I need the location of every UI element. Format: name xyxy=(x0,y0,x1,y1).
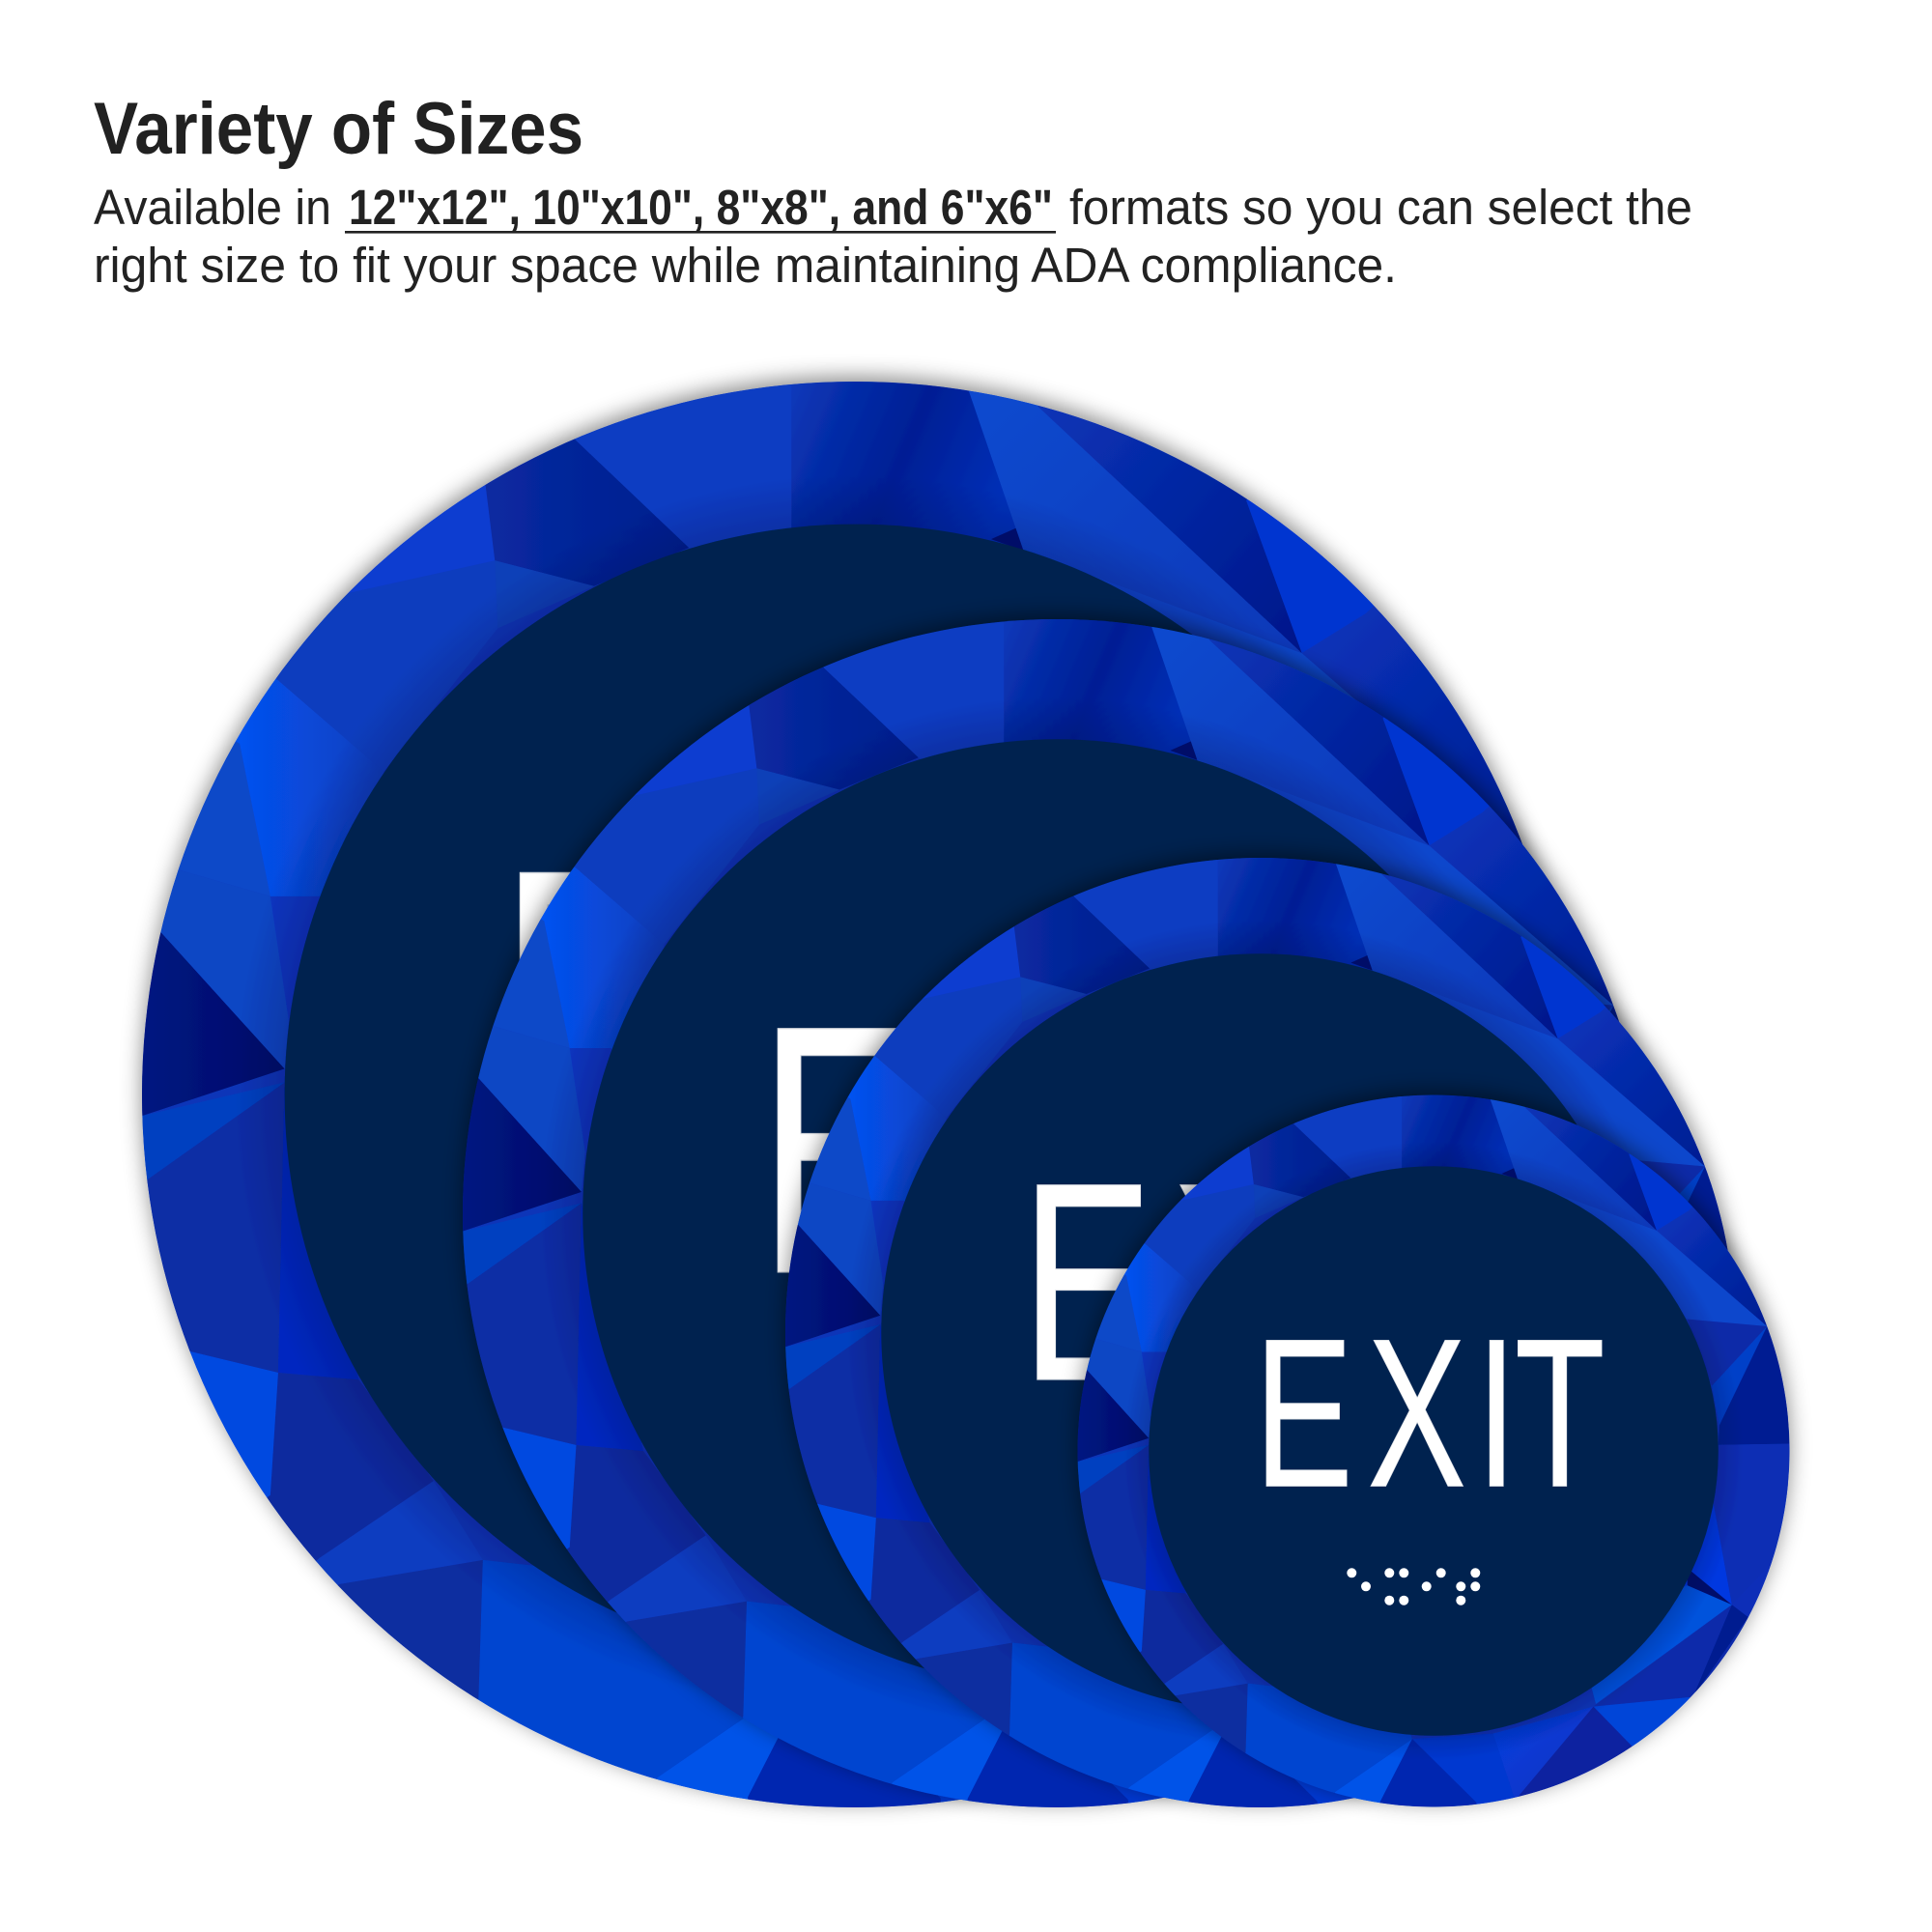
bold sizes underline xyxy=(345,231,1056,234)
navy face xyxy=(582,739,1531,1688)
faceted blue ring xyxy=(1069,1083,1804,1816)
navy face xyxy=(881,953,1639,1712)
braille dots xyxy=(1347,1568,1480,1605)
EXIT lettering: EXIT xyxy=(1254,1294,1605,1532)
line 1 lead-in: Available in xyxy=(94,180,331,235)
faceted blue ring xyxy=(456,607,1643,1817)
sign: 6x6 xyxy=(1069,1083,1804,1816)
navy face xyxy=(1149,1166,1719,1736)
line 1 bold sizes: 12"x12", 10"x10", 8"x8", and 6"x6" xyxy=(349,180,1053,235)
EXIT lettering: EXIT xyxy=(1021,1123,1490,1440)
faceted blue ring xyxy=(777,846,1746,1817)
line 1 ending: formats so you can select the xyxy=(1069,180,1692,235)
sign: 10x10 xyxy=(456,607,1643,1817)
EXIT lettering: EXIT xyxy=(757,953,1344,1349)
description text xyxy=(94,180,1692,293)
line 2: right size to fit your space while maintaining ADA compliance. xyxy=(94,238,1397,293)
navy face xyxy=(285,525,1425,1664)
EXIT lettering: EXIT xyxy=(496,781,1199,1256)
title: Variety of Sizes xyxy=(94,88,583,170)
faceted blue ring xyxy=(128,362,1550,1817)
sign: 8x8 xyxy=(777,846,1746,1817)
